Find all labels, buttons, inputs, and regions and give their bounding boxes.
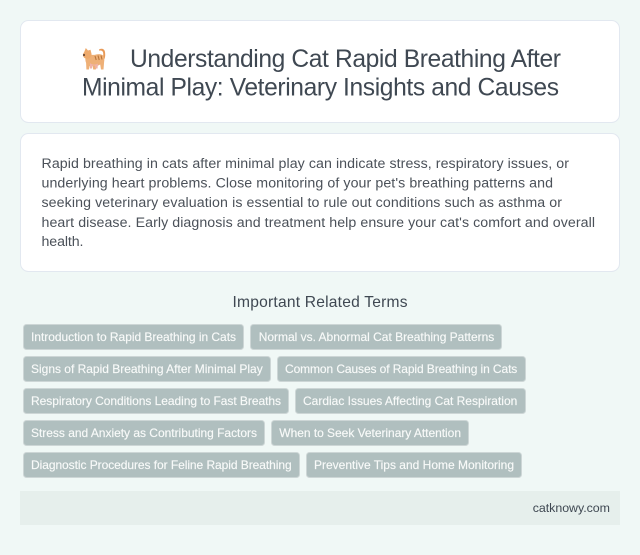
chip (24, 356, 270, 382)
chip: Common Causes of Rapid Breathing in Cats (285, 362, 517, 376)
chip (272, 420, 468, 446)
title text: Understanding Cat Rapid Breathing After (130, 46, 561, 73)
chip: Introduction to Rapid Breathing in Cats (31, 330, 236, 344)
title text: Minimal Play: Veterinary Insights and Causes (82, 74, 559, 102)
panel: title card (20, 20, 620, 122)
chip: Preventive Tips and Home Monitoring (314, 458, 514, 472)
chip: Normal vs. Abnormal Cat Breathing Patterns (259, 330, 494, 344)
footer bar (20, 491, 620, 525)
chip: Cardiac Issues Affecting Cat Respiration (303, 394, 517, 408)
chip (24, 452, 300, 478)
summary paragraph: Rapid breathing in cats after minimal play can indicate stress, respiratory issues, or (42, 156, 569, 172)
related terms chips (24, 324, 526, 478)
chip (24, 324, 244, 350)
summary paragraph: heart disease. Early diagnosis and treatment help ensure your cat's comfort and overall (42, 215, 595, 231)
chip: Signs of Rapid Breathing After Minimal Play (31, 362, 263, 376)
summary paragraph: underlying heart problems. Close monitoring of your pet's breathing patterns and (42, 176, 553, 192)
panel: summary card (20, 134, 620, 272)
chip (250, 324, 502, 350)
summary paragraph (42, 156, 595, 250)
chip (24, 388, 288, 414)
footer source text: catknowy.com (533, 501, 610, 515)
icon: cat (83, 48, 105, 70)
chip: When to Seek Veterinary Attention (279, 426, 461, 440)
chip: Respiratory Conditions Leading to Fast Breaths (31, 394, 281, 408)
heading: important related terms: Important Related Terms (232, 294, 408, 311)
chip: Diagnostic Procedures for Feline Rapid Breathing (31, 458, 292, 472)
title text (82, 46, 561, 102)
summary paragraph: seeking veterinary evaluation is essential to rule out conditions such as asthma or (42, 195, 562, 211)
summary paragraph: health. (42, 234, 84, 250)
chip (306, 452, 522, 478)
chip: Stress and Anxiety as Contributing Factors (31, 426, 257, 440)
chip (278, 356, 526, 382)
chip (24, 420, 264, 446)
chip (296, 388, 526, 414)
